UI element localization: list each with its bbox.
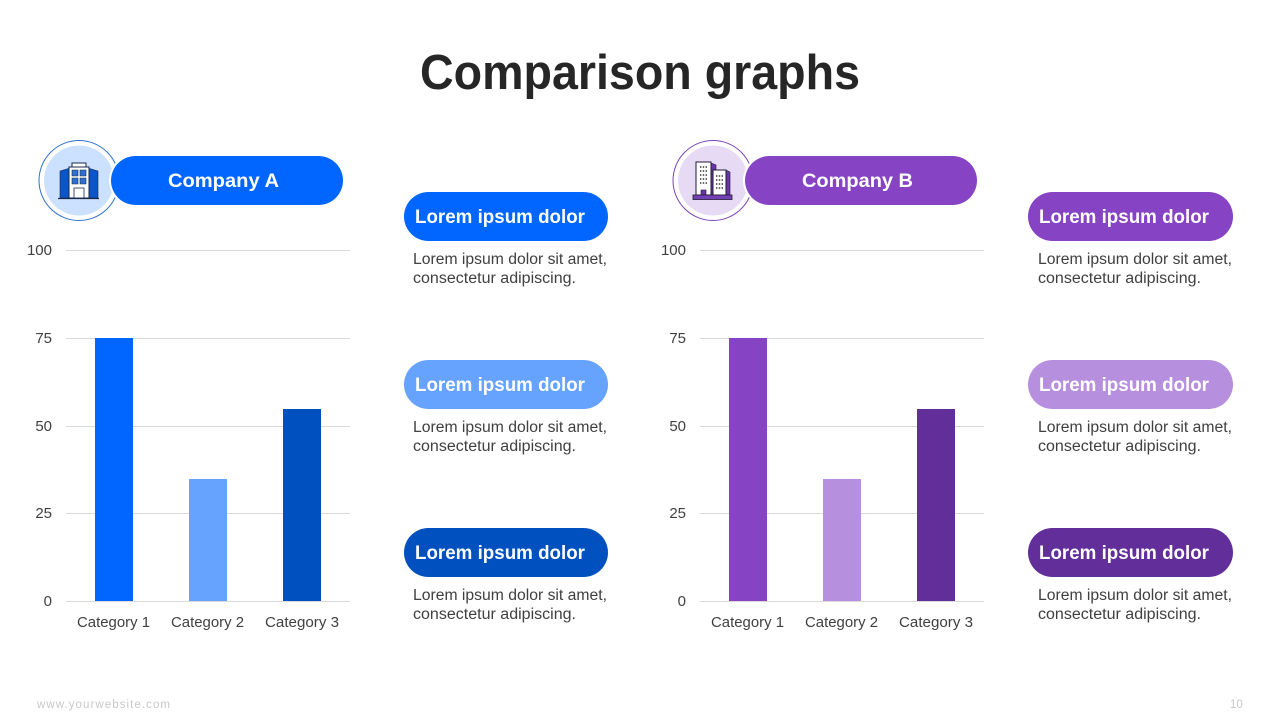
x axis labels: Category 3 <box>899 614 973 631</box>
title: Comparison graphs <box>420 46 860 100</box>
legend item: Company B 2: consectetur adipiscing. <box>1038 438 1201 455</box>
legend item: Company A 2 <box>404 360 608 455</box>
x axis labels <box>711 614 973 631</box>
legend item: Company B 1: consectetur adipiscing. <box>1038 270 1201 287</box>
legend item: Company B 3: Lorem ipsum dolor <box>1039 542 1209 564</box>
page number: 10 <box>1230 699 1243 711</box>
legend item: Company A 2: Lorem ipsum dolor <box>415 374 585 396</box>
x axis labels: Category 2 <box>171 614 244 631</box>
legend item: Company A 2: Lorem ipsum dolor sit amet, <box>413 419 607 436</box>
legend item: Company B 2 <box>1028 360 1233 455</box>
x axis labels: Category 1 <box>77 614 150 631</box>
icon: Company A building badge <box>39 140 119 220</box>
footer website: www.yourwebsite.com <box>36 699 170 711</box>
legend item: Company A 3: Lorem ipsum dolor sit amet, <box>413 587 607 604</box>
y axis labels: 75 <box>669 330 686 347</box>
y axis labels: 50 <box>35 418 52 435</box>
legend item: Company A 3 <box>404 528 608 623</box>
legend item: Company B 3 <box>1028 528 1233 623</box>
legend item: Company A 1: Lorem ipsum dolor <box>415 206 585 228</box>
icon: Company B building badge <box>673 140 753 220</box>
y axis labels: 0 <box>44 593 52 610</box>
bars <box>729 338 955 601</box>
y axis labels: 75 <box>35 330 52 347</box>
legend item: Company B 2: Lorem ipsum dolor <box>1039 374 1209 396</box>
legend item: Company A 2: consectetur adipiscing. <box>413 438 576 455</box>
y axis labels: 25 <box>35 505 52 522</box>
Company A label pill <box>109 154 345 207</box>
y axis labels: 50 <box>669 418 686 435</box>
legend item: Company A 3: Lorem ipsum dolor <box>415 542 585 564</box>
y axis labels <box>661 242 686 610</box>
legend item: Company A 3: consectetur adipiscing. <box>413 606 576 623</box>
legend item: Company B 2: Lorem ipsum dolor sit amet, <box>1038 419 1232 436</box>
legend item: Company A 1 <box>404 192 608 287</box>
x axis labels <box>77 614 339 631</box>
x axis labels: Category 3 <box>265 614 339 631</box>
y axis labels <box>27 242 52 610</box>
y axis labels: 100 <box>661 242 686 259</box>
legend item: Company B 3: Lorem ipsum dolor sit amet, <box>1038 587 1232 604</box>
bars <box>95 338 321 601</box>
legend item: Company A 1: consectetur adipiscing. <box>413 270 576 287</box>
Company B label pill: Company B <box>802 171 913 192</box>
y axis labels: 100 <box>27 242 52 259</box>
x axis labels: Category 1 <box>711 614 784 631</box>
bar chart: Company B <box>661 242 984 631</box>
legend item: Company B 1: Lorem ipsum dolor sit amet, <box>1038 251 1232 268</box>
legend item: Company B 3: consectetur adipiscing. <box>1038 606 1201 623</box>
bar chart: Company A <box>27 242 350 631</box>
Company A label pill: Company A <box>168 171 279 192</box>
y axis labels: 25 <box>669 505 686 522</box>
x axis labels: Category 2 <box>805 614 878 631</box>
panel: Company A header <box>39 140 345 220</box>
legend item: Company A 1: Lorem ipsum dolor sit amet, <box>413 251 607 268</box>
legend item: Company B 1 <box>1028 192 1233 287</box>
legend item: Company B 1: Lorem ipsum dolor <box>1039 206 1209 228</box>
panel: Company B header <box>673 140 979 220</box>
Company B label pill <box>743 154 979 207</box>
y axis labels: 0 <box>678 593 686 610</box>
